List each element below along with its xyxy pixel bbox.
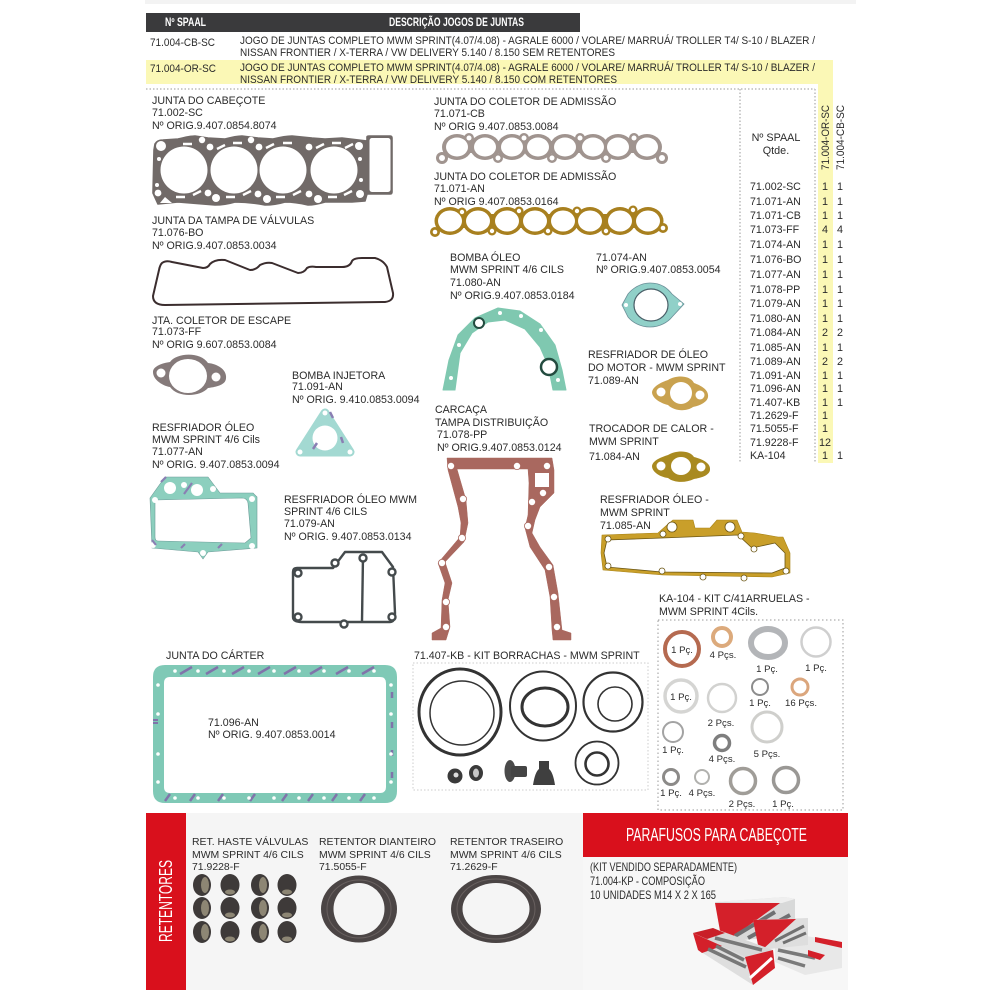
heading: retentores: RETENTORES [156,860,176,942]
quantity table: 12 [819,437,831,449]
kit row: 71.004-CB-SC: JOGO DE JUNTAS COMPLETO MWM SPRINT(4.07/4.08) - AGRALE 6000 / VOLARE/ MARRUÁ/ TROLLER T4/ S-10 / BLAZER / [240,34,815,47]
washer quantities: 1 Pç. [805,663,827,674]
label: tampa de valvulas: Nº ORIG.9.407.0853.0034 [152,240,277,252]
label: carcaca tampa distribuicao: TAMPA DISTRIBUIÇÃO [435,416,548,429]
washer quantities: 1 Pç. [660,788,682,799]
gasket: 71.084-AN [652,451,710,482]
quantity table: 1 [837,269,843,281]
label: coletor de admissao CB: Nº ORIG 9.407.0853.0084 [434,121,559,133]
quantity table: 2 [837,356,843,368]
label: junta do cabecote: 71.002-SC [152,107,203,119]
label: trocador de calor: MWM SPRINT [589,436,659,448]
quantity table: 1 [837,383,843,395]
quantity table: 1 [822,298,828,310]
label: junta do carter: JUNTA DO CÁRTER [166,649,265,662]
quantity table: 1 [822,284,828,296]
label: resfriador oleo 71.077-AN: MWM SPRINT 4/6 Cils [152,434,260,446]
label: bomba oleo: 71.080-AN [450,277,501,289]
quantity table: 1 [837,239,843,251]
label: trocador de calor [589,423,714,463]
quantity table: 1 [822,239,828,251]
quantity table: 1 [822,342,828,354]
washer quantities: 1 Pç. [671,645,693,656]
label: haste valvulas [192,835,308,873]
label: bomba oleo: BOMBA ÓLEO [450,251,520,264]
text: kit description: (KIT VENDIDO SEPARADAMENTE) [590,861,737,874]
label: kit borrachas: 71.407-KB - KIT BORRACHAS - MWM SPRINT [414,650,640,662]
gasket: intake manifold AN [430,206,668,237]
text: carter part number: Nº ORIG. 9.407.0853.0014 [208,729,336,741]
icon: rear seal [451,875,541,943]
quantity table: 71.077-AN [750,269,801,281]
table header bar: DESCRIÇÃO JOGOS DE JUNTAS [389,16,524,29]
quantity table: 1 [822,210,828,222]
quantity table: KA-104 [750,450,786,462]
quantity table: 1 [837,254,843,266]
quantity table: 1 [837,298,843,310]
label: tampa de valvulas: 71.076-BO [152,227,203,239]
gasket: oil cooler 71.077-AN [150,477,257,559]
washer row 4 [664,768,798,794]
label: resfriador oleo 71.077-AN: RESFRIADOR ÓLEO [152,421,254,434]
washer quantities: 4 Pçs. [710,650,736,661]
gasket: intake manifold CB [436,133,668,164]
label: trocador de calor: 71.084-AN [589,451,640,463]
icon: bolt boxes [693,897,842,985]
label: junta do cabecote: JUNTA DO CABEÇOTE [152,95,265,107]
label: bomba injetora: BOMBA INJETORA [292,370,386,382]
washer quantities: 4 Pçs. [689,788,715,799]
label: tampa de valvulas: JUNTA DA TAMPA DE VÁLVULAS [152,214,314,227]
label: bomba injetora: Nº ORIG. 9.410.0853.0094 [292,394,420,406]
washer quantities [660,645,827,810]
quantity table: 1 [822,313,828,325]
label: resfriador oleo 71.085-AN: MWM SPRINT [600,507,670,519]
label: resfriador de oleo do motor: DO MOTOR - MWM SPRINT [588,362,726,374]
panel: parafusos para cabecote [583,813,848,990]
panel: retentores [146,813,583,990]
label: bomba oleo [450,251,575,302]
kit row highlighted: 71.004-OR-SC: NISSAN FRONTIER / X-TERRA / VW DELIVERY 5.140 / 8.150 COM RETENTORES [240,74,617,86]
label: carcaca tampa distribuicao: CARCAÇA [435,404,488,416]
quantity table: 1 [837,370,843,382]
quantity table: 1 [822,370,828,382]
label: coletor de escape: Nº ORIG 9.607.0853.0084 [152,339,277,351]
washer quantities: 5 Pçs. [754,749,780,760]
label: bomba injetora [292,370,420,406]
label: 71.074-AN: 71.074-AN [596,252,647,264]
quantity table: 71.084-AN [750,327,801,339]
label: KA-104 kit: KA-104 - KIT C/41ARRUELAS - [659,593,810,605]
rotated column header CB: 71.004-CB-SC [835,105,847,170]
label: retentor traseiro [450,837,563,873]
quantity table: 71.2629-F [750,410,799,422]
label: resfriador oleo 71.079-AN: SPRINT 4/6 CILS [284,506,367,518]
quantity table: 1 [822,450,828,462]
text: kit description [590,861,737,902]
quantity table: 71.071-CB [750,210,801,222]
icon: valve stem seals [193,874,296,943]
washer quantities: 1 Pç. [670,692,692,703]
kit row highlighted: 71.004-OR-SC: 71.004-OR-SC [150,63,216,75]
label: coletor de admissao AN: 71.071-AN [434,183,485,195]
quantity table: 71.079-AN [750,298,801,310]
label: junta do cabecote [152,95,277,132]
label: retentor dianteiro: MWM SPRINT 4/6 CILS [319,850,431,861]
label: coletor de admissao AN [434,170,616,208]
label: resfriador oleo 71.077-AN [152,421,280,471]
table header bar: Nº SPAAL [165,16,206,29]
kit row: 71.004-CB-SC: 71.004-CB-SC [150,37,215,49]
quantity table: 1 [822,269,828,281]
quantity table: 71.085-AN [750,342,801,354]
gasket: oil pan [153,665,397,803]
label: coletor de admissao CB: 71.071-CB [434,108,485,120]
panel: rubber kit [413,663,648,790]
label: resfriador oleo 71.077-AN: 71.077-AN [152,446,203,458]
quantity table: 71.5055-F [750,423,799,435]
gasket: valve cover [153,258,393,305]
label: KA-104 kit: MWM SPRINT 4Cils. [659,606,758,618]
panel: washers kit [658,620,843,810]
label: coletor de admissao CB [434,95,616,133]
quantity table: 71.080-AN [750,313,801,325]
quantity table: 1 [822,181,828,193]
washer quantities: 1 Pç. [772,799,794,810]
quantity table: 1 [837,342,843,354]
label: resfriador oleo 71.085-AN [600,493,709,532]
label: retentor traseiro: RETENTOR TRASEIRO [450,837,563,848]
label: resfriador oleo 71.079-AN: 71.079-AN [284,518,335,530]
label: KA-104 kit [659,593,810,618]
quantity table: 1 [837,284,843,296]
washer quantities: 4 Pçs. [709,754,735,765]
label: retentor traseiro: MWM SPRINT 4/6 CILS [450,850,562,861]
quantity table: 1 [822,410,828,422]
gasket: 71.085-AN [601,520,790,581]
label: resfriador oleo 71.079-AN [284,493,417,543]
quantity table: Nº SPAAL [752,132,800,144]
washer row 3 [663,712,782,750]
kit row: 71.004-CB-SC [150,34,815,59]
quantity table: 71.407-KB [750,397,800,409]
quantity table: 2 [822,356,828,368]
rotated column header OR: 71.004-OR-SC [820,105,832,170]
quantity table: 2 [822,327,828,339]
label: tampa de valvulas [152,214,314,252]
quantity table: 71.073-FF [750,224,800,236]
text: kit description: 71.004-KP - COMPOSIÇÃO [590,875,705,888]
gasket: exhaust manifold [153,355,226,395]
gasket: 71.089-AN [652,377,708,410]
washer quantities: 1 Pç. [756,664,778,675]
label: retentor dianteiro [319,837,436,873]
quantity table: 71.074-AN [750,239,801,251]
label: retentor dianteiro: RETENTOR DIANTEIRO [319,837,436,848]
label: resfriador oleo 71.079-AN: Nº ORIG. 9.407.0853.0134 [284,531,412,543]
label: coletor de admissao CB: JUNTA DO COLETOR DE ADMISSÃO [434,95,616,108]
label: carcaca tampa distribuicao: 71.078-PP [437,429,487,441]
quantity table: 71.9228-F [750,437,799,449]
label: carcaca tampa distribuicao [435,404,562,454]
gasket: 71.074-AN [622,283,684,327]
washer row 2 [665,679,808,712]
quantity table: 71.091-AN [750,370,801,382]
label: resfriador de oleo do motor: 71.089-AN [588,375,639,387]
label: resfriador oleo 71.079-AN: RESFRIADOR ÓLEO MWM [284,493,417,506]
gasket: oil cooler 71.079-AN [293,552,396,628]
label: retentor traseiro: 71.2629-F [450,862,498,873]
label: retentor dianteiro: 71.5055-F [319,862,367,873]
washer quantities: 1 Pç. [749,698,771,709]
label: haste valvulas: RET. HASTE VÁLVULAS [192,835,308,848]
label: coletor de escape: JTA. COLETOR DE ESCAPE [152,315,291,327]
quantity table: 2 [837,327,843,339]
quantity table: Qtde. [763,145,789,157]
label: 71.074-AN [596,252,721,276]
quantity table: 1 [822,254,828,266]
label: resfriador oleo 71.085-AN: 71.085-AN [600,520,651,532]
gasket: injection pump [298,410,352,454]
quantity table: 71.096-AN [750,383,801,395]
label: bomba injetora: 71.091-AN [292,381,343,393]
washer row 1 [665,628,830,666]
gasket: cylinder head [153,136,392,205]
quantity table: 71.076-BO [750,254,801,266]
kit row: 71.004-CB-SC: NISSAN FRONTIER / X-TERRA / VW DELIVERY 5.140 / 8.150 SEM RETENTORES [240,47,615,59]
label: resfriador oleo 71.077-AN: Nº ORIG. 9.407.0853.0094 [152,459,280,471]
label: bomba oleo: MWM SPRINT 4/6 CILS [450,264,564,276]
quantity table: 71.089-AN [750,356,801,368]
icon: front seal [321,876,397,942]
washer quantities: 1 Pç. [662,745,684,756]
kit row highlighted: 71.004-OR-SC [146,60,833,86]
label: haste valvulas: MWM SPRINT 4/6 CILS [192,850,304,861]
quantity table: 4 [837,224,843,236]
text: carter part number: 71.096-AN [208,717,259,729]
quantity table: 71.078-PP [750,284,800,296]
quantity table: 1 [837,397,843,409]
quantity table: 1 [837,210,843,222]
quantity table: 71.071-AN [750,196,801,208]
label: junta do cabecote: Nº ORIG.9.407.0854.8074 [152,120,277,132]
gasket: oil pump [443,308,566,390]
text: carter part number [208,717,336,741]
label: bomba oleo: Nº ORIG.9.407.0853.0184 [450,290,575,302]
quantity table: 1 [837,196,843,208]
label: coletor de escape [152,315,291,351]
quantity table [750,105,847,462]
text: kit description: 10 UNIDADES M14 X 2 X 165 [590,889,716,902]
quantity table: 1 [822,423,828,435]
label: coletor de escape: 71.073-FF [152,326,202,338]
label: resfriador de oleo do motor: RESFRIADOR DE ÓLEO [588,348,708,361]
washer quantities: 16 Pçs. [785,698,817,709]
quantity table: 71.002-SC [750,181,801,193]
label: 71.074-AN: Nº ORIG.9.407.0853.0054 [596,264,721,276]
washer quantities: 2 Pçs. [708,718,734,729]
kit row highlighted: 71.004-OR-SC: JOGO DE JUNTAS COMPLETO MWM SPRINT(4.07/4.08) - AGRALE 6000 / VOLARE/ MARRUÁ/ TROLLER T4/ S-10 / BLAZER / [240,61,815,74]
label: coletor de admissao AN: Nº ORIG 9.407.0853.0164 [434,196,559,208]
quantity table: 1 [837,450,843,462]
quantity table: 1 [822,397,828,409]
quantity table: 1 [822,383,828,395]
small rubber parts [448,760,555,785]
label: haste valvulas: 71.9228-F [192,862,240,873]
label: carcaca tampa distribuicao: Nº ORIG.9.407.0853.0124 [437,442,562,454]
label: resfriador oleo 71.085-AN: RESFRIADOR ÓLEO - [600,493,709,506]
label: resfriador de oleo do motor [588,348,726,387]
label: coletor de admissao AN: JUNTA DO COLETOR DE ADMISSÃO [434,170,616,183]
table header bar [146,13,580,32]
quantity table: 1 [837,313,843,325]
heading: parafusos: PARAFUSOS PARA CABEÇOTE [626,825,807,845]
washer quantities: 2 Pçs. [729,799,755,810]
quantity table: 1 [822,196,828,208]
gasket: timing cover [432,458,571,640]
quantity table: 1 [837,181,843,193]
label: trocador de calor: TROCADOR DE CALOR - [589,423,714,435]
quantity table: 4 [822,224,828,236]
